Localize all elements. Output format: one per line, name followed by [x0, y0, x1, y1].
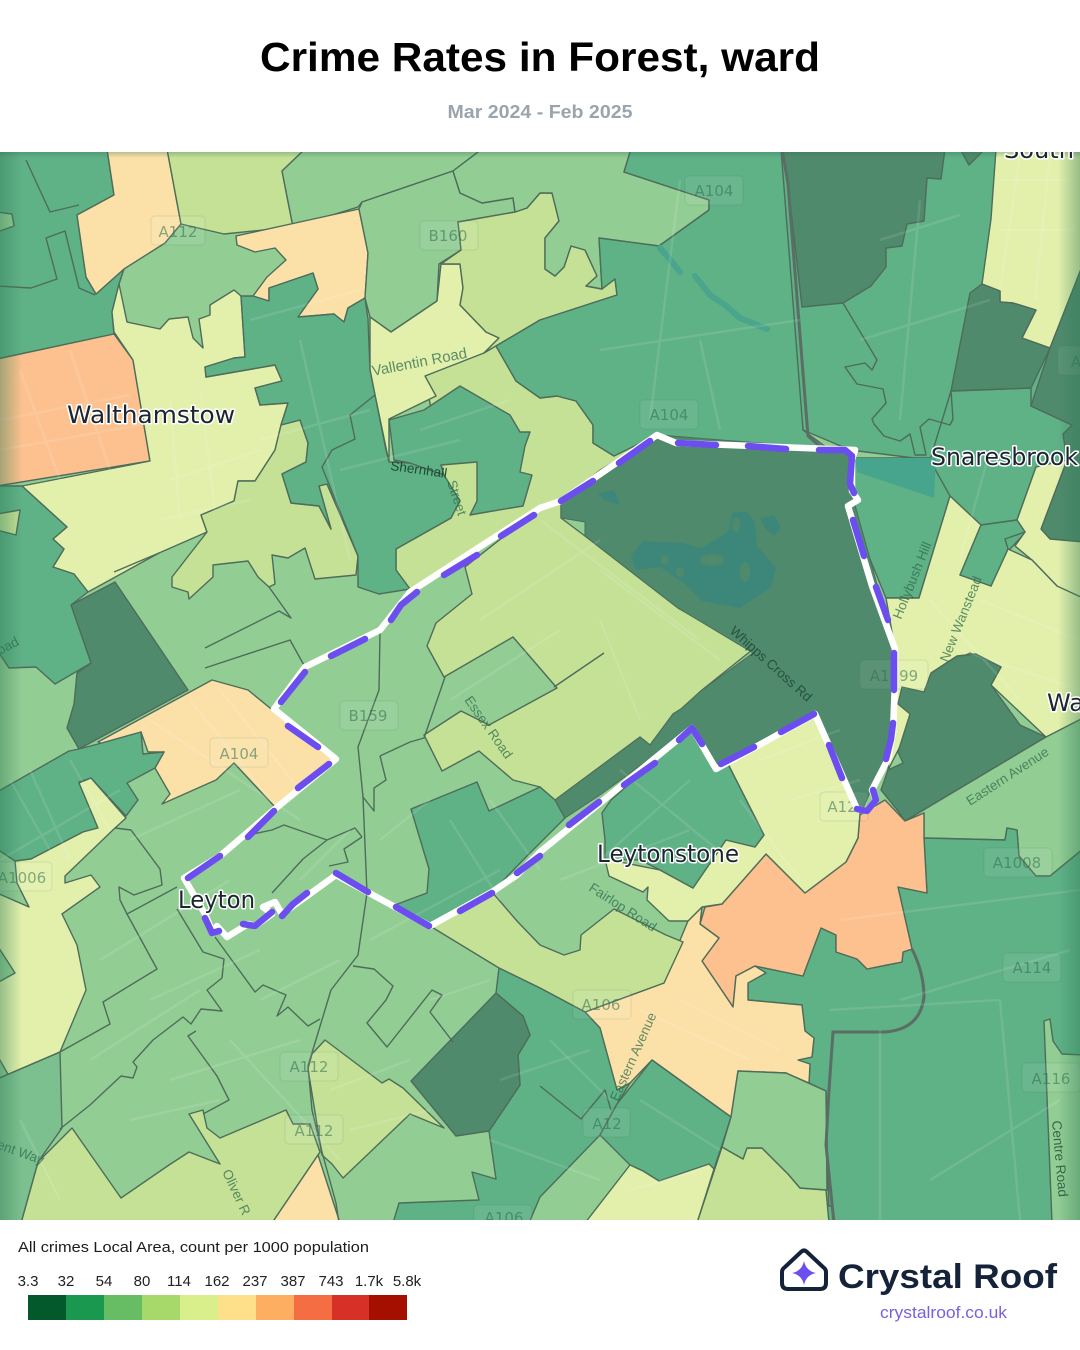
legend tick labels: 387 [280, 1273, 306, 1290]
wordmark: Crystal Roof [838, 1258, 1058, 1296]
road shields: A104 [695, 182, 733, 200]
road shields: B160 [429, 227, 467, 245]
road shields: A104 [220, 745, 258, 763]
road shields: A116 [1032, 1070, 1070, 1088]
road names: Essex Road [462, 693, 516, 761]
place labels: South [1004, 136, 1074, 164]
road shields: A112 [290, 1058, 328, 1076]
road names [0, 345, 1071, 1218]
road shields: A12 [592, 1115, 622, 1133]
road shields: A1008 [993, 854, 1041, 872]
road shields: A112 [159, 223, 197, 241]
legend tick labels: 162 [204, 1273, 230, 1290]
road shields: A106 [582, 996, 620, 1014]
legend tick labels: 3.3 [18, 1273, 38, 1290]
legend colour bar [28, 1295, 407, 1320]
road shields: A12 [827, 798, 857, 816]
road shields: A104 [650, 406, 688, 424]
cemetery teal area near Snaresbrook [855, 458, 936, 498]
legend title: All crimes Local Area, count per 1000 population [18, 1240, 369, 1256]
road shields [0, 176, 1080, 1234]
legend tick labels: 54 [96, 1273, 112, 1290]
place labels: Walthamstow [67, 401, 235, 429]
icon: house with star [782, 1250, 826, 1289]
legend tick labels: 80 [134, 1273, 150, 1290]
crime rate regions [0, 149, 1080, 1223]
lakes in the forest [598, 490, 781, 608]
road names: Oliver R [219, 1167, 254, 1218]
vignette edges [0, 152, 1080, 1220]
title: Crime Rates in Forest, ward [260, 34, 820, 80]
road shields: A1199 [870, 667, 918, 685]
website: crystalroof.co.uk [880, 1304, 1008, 1322]
subtitle: Mar 2024 - Feb 2025 [448, 102, 632, 122]
road shields: A106 [485, 1209, 523, 1227]
road names: Fairlop Road [586, 880, 659, 935]
road names: Centre Road [1049, 1120, 1071, 1198]
legend tick labels: 32 [58, 1273, 74, 1290]
road names: Hollybush Hill [890, 540, 934, 621]
road names: Shernhall [390, 458, 448, 481]
legend tick labels: 5.8k [393, 1273, 422, 1290]
thick road outlines [782, 149, 924, 1223]
place labels: Leytonstone [597, 840, 739, 868]
road shields: A114 [1013, 959, 1051, 977]
water: northern stream [660, 248, 767, 329]
road names: Vallentin Road [371, 345, 468, 380]
legend tick labels: 743 [318, 1273, 344, 1290]
legend tick labels [18, 1273, 422, 1290]
legend [18, 1240, 422, 1320]
street network [0, 155, 1080, 1220]
legend tick labels: 1.7k [355, 1273, 384, 1290]
legend tick labels: 114 [167, 1273, 191, 1290]
place labels: Snaresbrook [931, 443, 1078, 471]
road names: Street [444, 478, 470, 517]
legend tick labels: 237 [242, 1273, 268, 1290]
place labels: Leyton [178, 886, 255, 914]
ward boundary: Forest [184, 435, 895, 937]
logo: Crystal Roof [782, 1250, 1058, 1322]
road names: Eastern Avenue [607, 1010, 659, 1103]
road names: New Wanstead [937, 574, 985, 664]
forest area, darkest green [555, 435, 895, 818]
road shields: A112 [295, 1122, 333, 1140]
road shields: B159 [349, 707, 387, 725]
place labels [67, 136, 1080, 914]
road names: Whipps Cross Rd [727, 623, 815, 705]
road names: Eastern Avenue [963, 744, 1051, 809]
